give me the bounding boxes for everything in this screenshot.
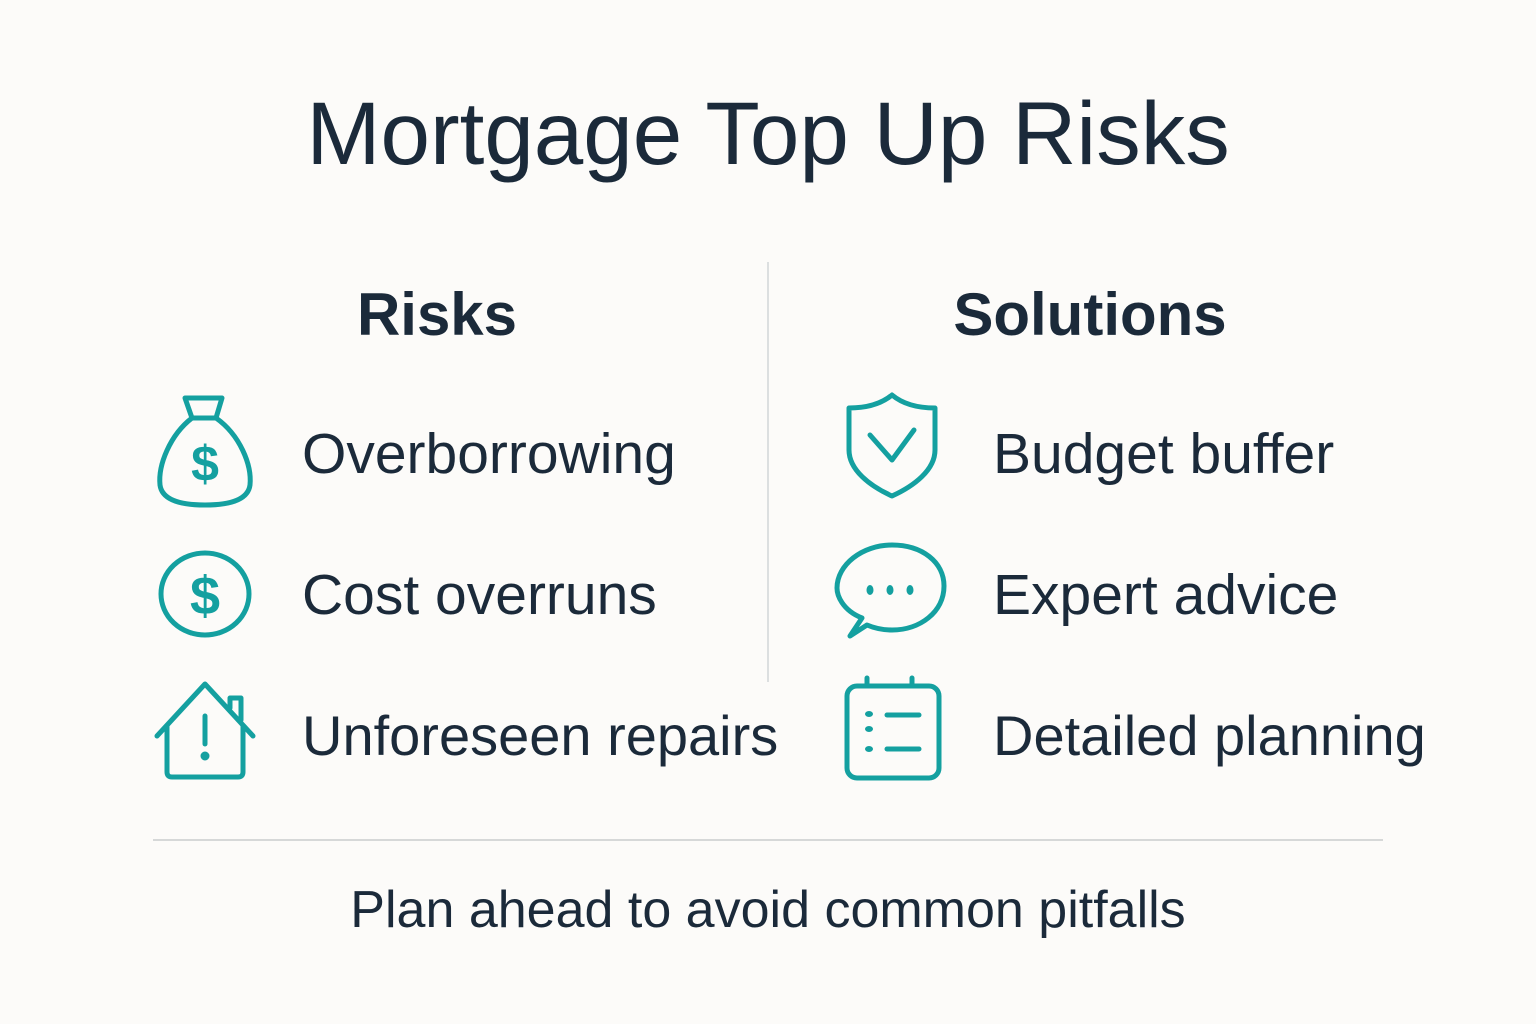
footer text: Plan ahead to avoid common pitfalls: [350, 881, 1186, 939]
icon: house: [154, 682, 256, 780]
text: Cost overruns: Cost overruns: [302, 563, 657, 627]
text: Overborrowing: Overborrowing: [302, 422, 676, 486]
text: Expert advice: Expert advice: [993, 563, 1338, 627]
icon: checklist calendar: [844, 676, 942, 780]
heading: Risks: Risks: [357, 281, 517, 348]
icon: money bag: $: [191, 436, 219, 492]
heading: Solutions: Solutions: [953, 281, 1227, 348]
icon: money bag: [157, 396, 253, 508]
icon: coin: [158, 550, 252, 638]
divider horizontal: [153, 839, 1383, 841]
divider vertical: [767, 262, 769, 682]
title: Mortgage Top Up Risks: [306, 83, 1230, 183]
icon: shield: [846, 392, 938, 498]
icon: chat bubble: [834, 542, 946, 638]
icon: coin: $: [190, 566, 220, 626]
text: Budget buffer: Budget buffer: [993, 422, 1334, 486]
text: Detailed planning: Detailed planning: [993, 704, 1426, 767]
text: Unforeseen repairs: Unforeseen repairs: [302, 704, 778, 767]
